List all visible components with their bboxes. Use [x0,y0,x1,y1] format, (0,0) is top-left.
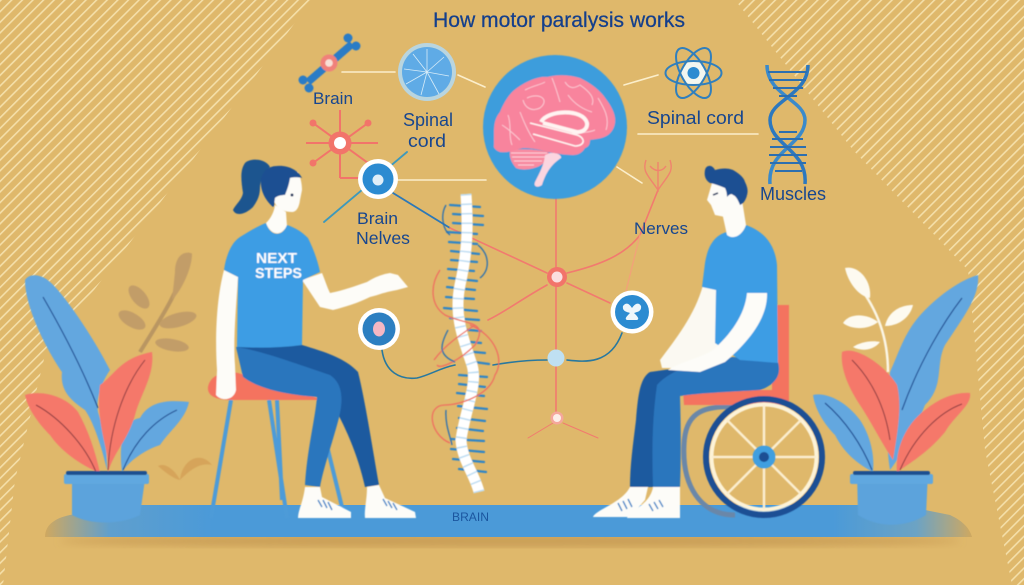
icon: DNA [767,65,808,184]
label: Nerves: Nerves [634,219,688,238]
leaf: coral right [897,393,970,472]
pot [857,472,928,525]
limbic loop [541,112,587,132]
ribs [444,205,489,472]
ponytail [233,160,270,214]
coral nerves [432,270,499,443]
label: Muscles: Muscles [760,184,826,204]
coral lines [450,190,658,418]
wheel [706,399,822,515]
chair seat [683,390,789,405]
spine [432,194,499,492]
neck [722,195,746,237]
shirt text: NEXT [256,250,297,267]
face [271,172,302,212]
leaf: big blue [25,275,110,470]
leaf: blue right [121,401,189,472]
leaf: coral left [25,393,100,473]
back leg [237,345,379,487]
front leg [652,357,779,487]
right plant [813,268,978,525]
leaf: coral left [842,351,899,460]
neck [266,205,287,233]
left arm [216,270,238,399]
leaf: blue left [813,394,873,472]
face [707,183,740,217]
stool seat [208,372,317,400]
lower node branch [528,423,598,438]
icon: node left [358,308,400,350]
left plant [25,275,189,522]
floor label: BRAIN [452,510,489,524]
brain stem [535,153,561,187]
shirt text: STEPS [255,265,302,282]
label: Spinal cord left: Spinal [403,110,453,130]
hair [705,166,748,205]
label: Brain Nelves [356,209,410,248]
node: coral hub [547,267,567,287]
shirt text [255,250,302,282]
icon: node right [610,290,654,334]
woman on stool [208,160,416,518]
white sprig [858,285,888,372]
icon: neuron [306,110,378,178]
icon: bone [298,34,360,92]
cerebellum [510,149,549,169]
connector lines [342,72,758,183]
label: Brain Nelves: Brain [357,209,398,228]
shoe [298,487,351,518]
brain circle [483,55,627,199]
icon: spinal cord disc [398,43,456,101]
blue line to spine [393,193,450,228]
vertebral column [458,194,479,492]
network lines [324,72,758,438]
floor shadow [60,535,960,547]
label: Brain Nelves: Nelves [356,228,410,248]
shoe stripes [618,499,663,511]
spine banding [458,194,479,492]
brain folds [502,78,607,145]
floor [45,505,972,537]
leaf: big blue [887,275,978,470]
leaf: coral centre [99,352,152,472]
hair [261,166,302,207]
right arm [302,273,408,310]
striped corner top right [738,0,1024,585]
near arm [668,293,767,372]
cerebellum folds [511,153,547,165]
eye [713,193,718,195]
label: Brain: Brain [313,89,353,108]
label: Spinal cord left [403,110,453,151]
node: lower [550,412,564,424]
icon: atom [666,43,722,103]
cerebrum [494,75,615,155]
shoe [627,487,680,518]
eye [290,194,294,196]
label: Spinal cord right: Spinal cord [647,108,744,128]
teal line [324,152,407,222]
chair frame [684,407,735,515]
back leg [630,365,700,487]
icon: nerves branch [645,160,671,192]
shirt [224,223,320,348]
title: How motor paralysis works [433,9,685,32]
node: light blue [548,350,564,366]
blue side nerves [442,205,487,445]
shoe stripes [318,499,397,510]
front leg [236,347,341,487]
stool legs [211,400,342,518]
far arm [660,285,722,368]
label: Spinal cord left: cord [408,131,446,151]
blue nerve curve [382,333,622,378]
background plant silhouette [116,253,212,480]
striped corner top left [0,0,310,585]
man in wheelchair [593,166,822,518]
shirt [702,225,778,363]
icon: node brain [358,159,398,199]
limbic band [530,123,583,146]
pot [72,472,146,522]
chair back [772,305,789,400]
shoe [365,485,416,518]
shoe [593,487,648,517]
